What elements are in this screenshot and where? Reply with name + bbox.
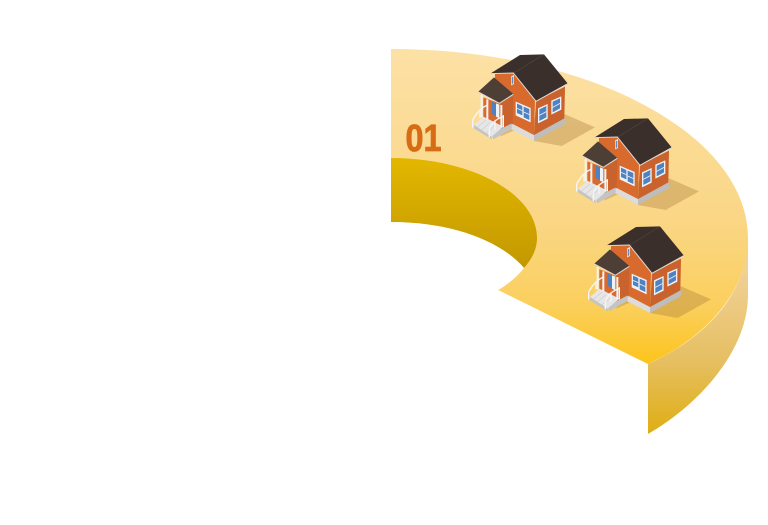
white hole below inner wall bbox=[391, 222, 524, 340]
inner wall of ring bbox=[391, 158, 537, 268]
number 01: 01 bbox=[406, 118, 442, 160]
house 2 bbox=[577, 118, 699, 210]
house 1 bbox=[473, 54, 595, 146]
outer side wall bbox=[648, 235, 748, 434]
top surface of ring segment bbox=[391, 49, 748, 364]
house 3 bbox=[589, 226, 711, 318]
